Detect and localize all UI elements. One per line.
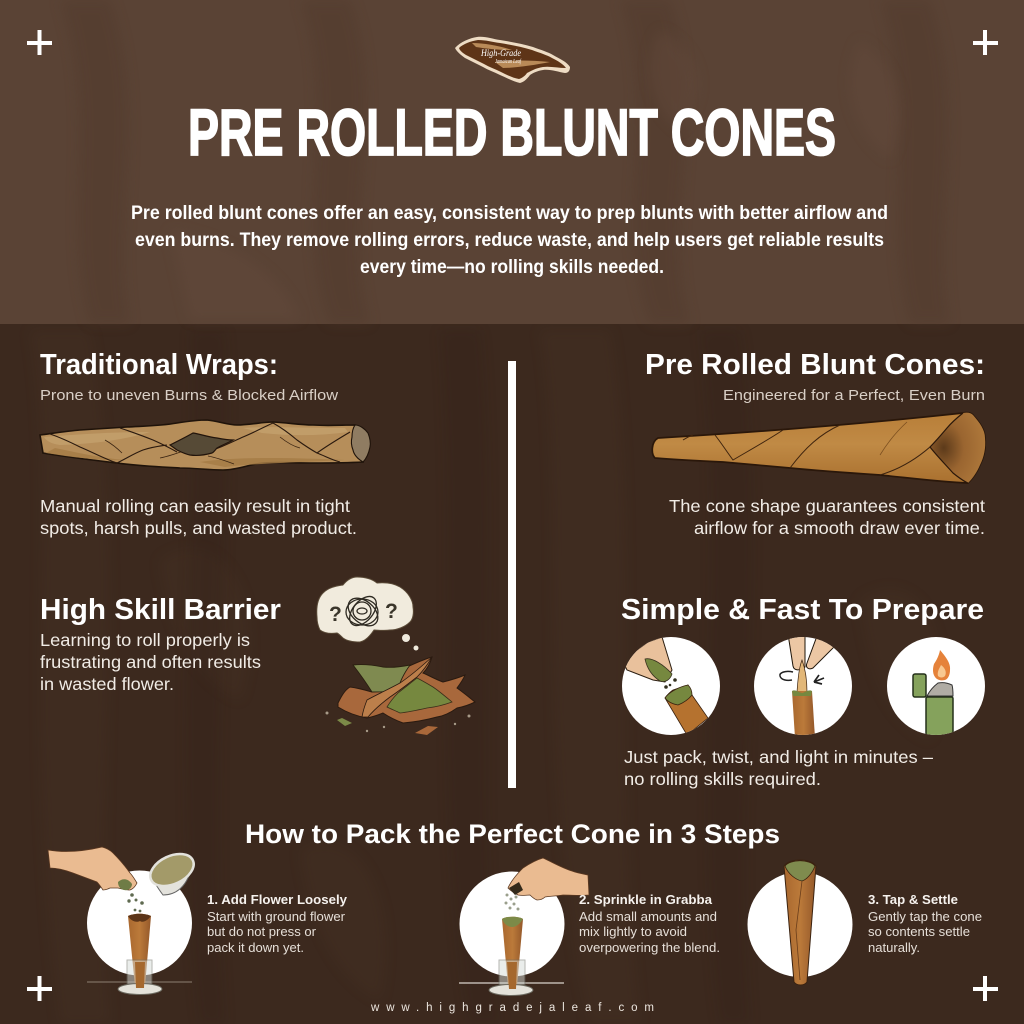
icon: thought bubble: ?	[329, 603, 342, 626]
illustration: pre-rolled cone	[652, 413, 985, 483]
body text: just pack: Just pack, twist, and light in minutes –	[624, 747, 933, 767]
body text: manual rolling	[40, 496, 357, 538]
heading: traditional wraps: Traditional Wraps:	[40, 349, 278, 381]
step 1 text: pack it down yet.	[207, 941, 304, 955]
logo: Jamaica map badge: Jamaican Leaf	[495, 58, 522, 65]
illustration: pile of torn leaf	[326, 657, 475, 735]
subheading: traditional wraps: Prone to uneven Burns & Blocked Airflow	[40, 388, 339, 404]
body text: just pack: no rolling skills required.	[624, 769, 821, 789]
body text: learning to roll: Learning to roll properly is	[40, 630, 250, 650]
step 2 text: Add small amounts and	[579, 910, 717, 924]
body text: cone shape: The cone shape guarantees consistent	[669, 496, 985, 516]
icon: twist circle	[754, 634, 852, 738]
body text: manual rolling: spots, harsh pulls, and wasted product.	[40, 518, 357, 538]
step 2 illustration	[459, 858, 589, 996]
body text: just pack	[624, 747, 933, 789]
body text: manual rolling: Manual rolling can easily result in tight	[40, 496, 350, 516]
intro paragraph: Pre rolled blunt cones offer an easy, consistent way to prep blunts with better airflow and	[131, 203, 888, 224]
illustration: hand-rolled wrap	[40, 420, 370, 470]
heading: high skill barrier: High Skill Barrier	[40, 594, 281, 626]
icon: lighter circle	[887, 637, 985, 737]
body text: cone shape: airflow for a smooth draw ever time.	[694, 518, 985, 538]
icon: thought bubble	[317, 577, 418, 650]
body text: learning to roll	[40, 630, 261, 694]
body text: learning to roll: frustrating and often results	[40, 652, 261, 672]
intro paragraph	[131, 203, 888, 278]
step 2 text: 2. Sprinkle in Grabba	[579, 893, 713, 907]
step 3 text: Gently tap the cone	[868, 910, 982, 924]
step 1 text: 1. Add Flower Loosely	[207, 893, 347, 907]
section heading: how to pack: How to Pack the Perfect Cone in 3 Steps	[245, 819, 780, 849]
heading: simple and fast: Simple & Fast To Prepare	[621, 594, 984, 626]
icon: pack circle	[622, 637, 720, 735]
step 3 text: 3. Tap & Settle	[868, 893, 958, 907]
step 3 text: so contents settle	[868, 925, 970, 939]
step 2 text	[579, 893, 720, 955]
panel: simple and fast to prepare	[621, 594, 985, 789]
subheading: pre rolled blunt cones: Engineered for a Perfect, Even Burn	[723, 388, 985, 404]
icon: thought bubble: ?	[385, 600, 398, 623]
step 3 text	[868, 893, 982, 955]
step 3 text: naturally.	[868, 941, 920, 955]
step 1 text: but do not press or	[207, 925, 316, 939]
intro paragraph: even burns. They remove rolling errors, reduce waste, and help users get reliable results	[135, 230, 884, 251]
heading: pre rolled blunt cones: Pre Rolled Blunt Cones:	[645, 349, 985, 381]
website url: www.highgradejaleaf.com	[370, 1002, 654, 1014]
logo: Jamaica map badge	[455, 37, 570, 83]
step 1 text	[207, 893, 347, 955]
panel: pre rolled blunt cones	[645, 349, 985, 538]
header panel	[0, 0, 1024, 324]
step 2 text: mix lightly to avoid	[579, 925, 687, 939]
logo: Jamaica map badge: High-Grade	[480, 49, 521, 59]
step 1 text: Start with ground flower	[207, 910, 345, 924]
step 3 illustration	[748, 860, 852, 985]
body text: learning to roll: in wasted flower.	[40, 674, 174, 694]
intro paragraph: every time—no rolling skills needed.	[360, 257, 664, 278]
center divider	[508, 361, 516, 788]
panel: high skill barrier	[40, 577, 475, 735]
step 2 text: overpowering the blend.	[579, 941, 720, 955]
body text: cone shape	[669, 496, 985, 538]
step 1 illustration	[48, 847, 199, 994]
panel: traditional wraps	[40, 349, 370, 538]
